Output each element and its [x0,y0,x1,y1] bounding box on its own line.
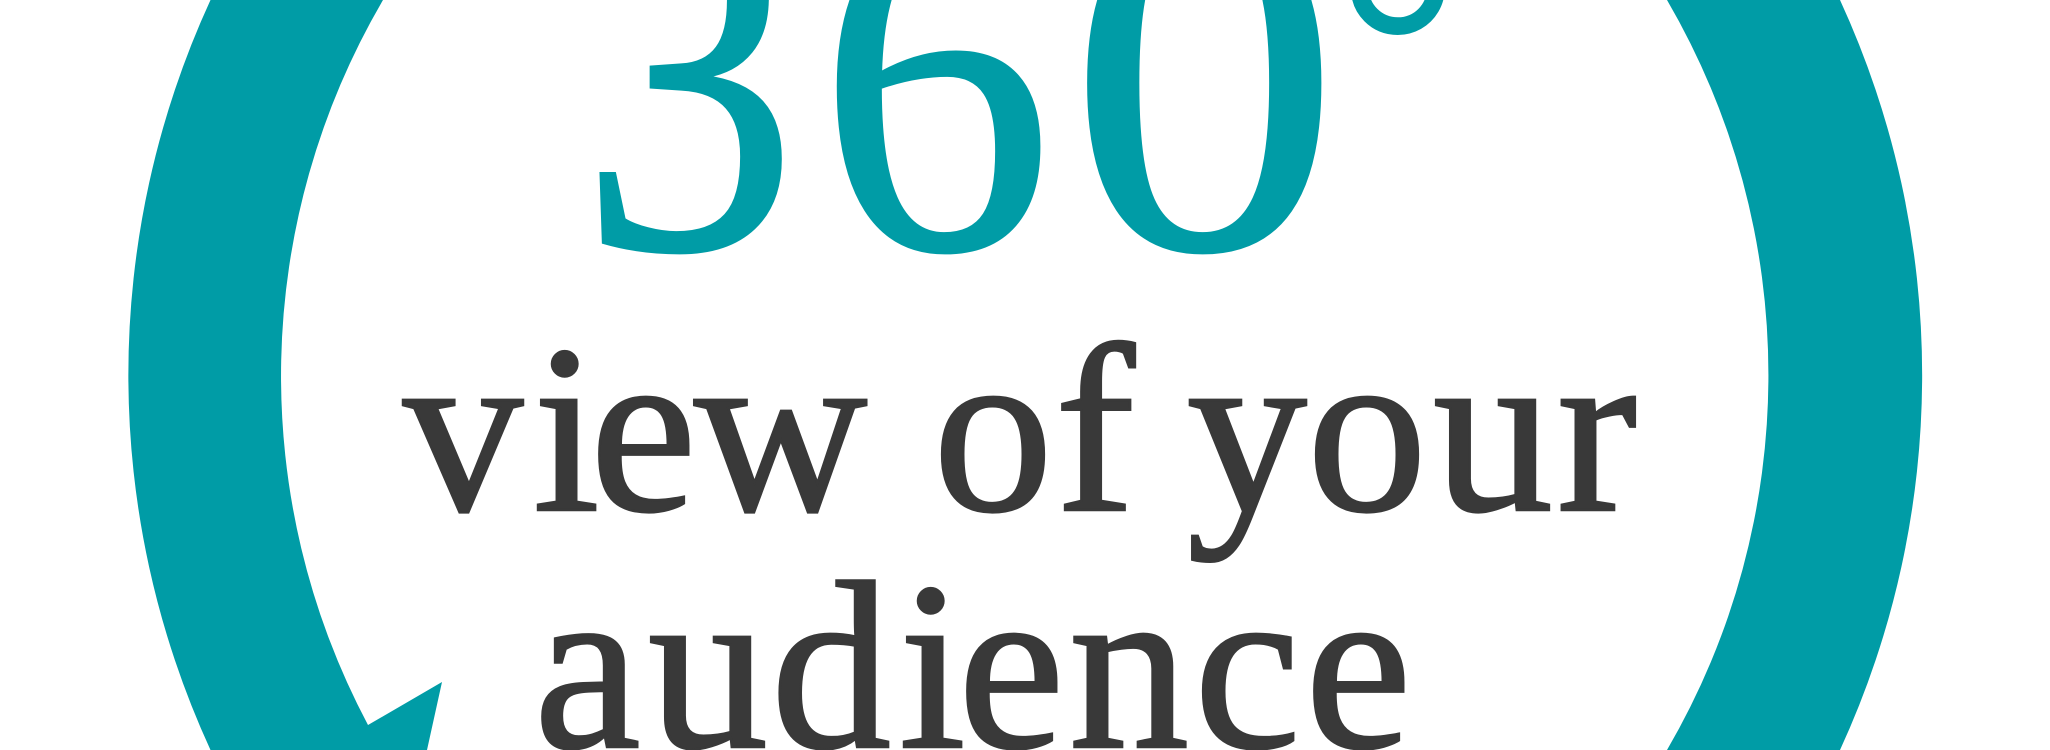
heading number: 360 degrees [580,0,1458,357]
arrow ring: right arc [1667,0,1922,750]
arrow ring: left arc with arrowhead [128,0,442,750]
heading line: view of your: view of your [403,296,1637,562]
